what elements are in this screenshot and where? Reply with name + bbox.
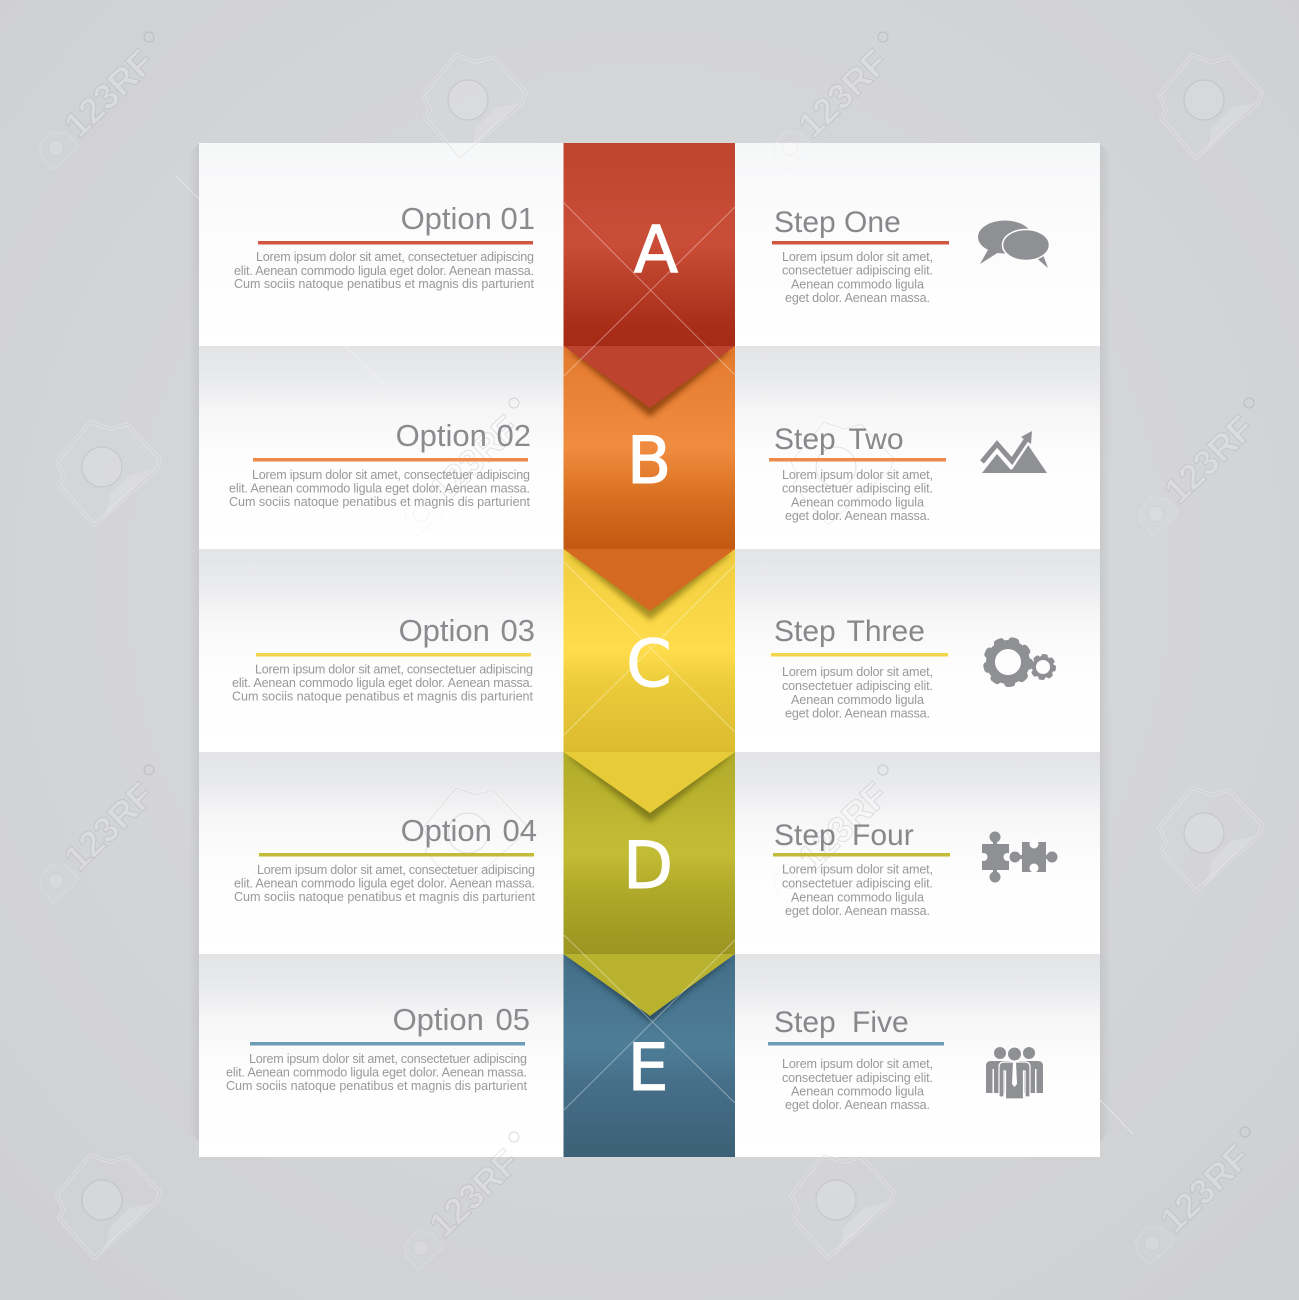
body text: Lorem ipsum dolor sit amet, consectetuer adipiscing (257, 863, 535, 877)
body text: Lorem ipsum dolor sit amet, consectetuer adipiscing (255, 662, 533, 676)
icon: gears (986, 640, 1054, 684)
option 05 block (226, 1002, 530, 1093)
body text: elit. Aenean commodo ligula eget dolor. Aenean massa. (232, 676, 533, 690)
body text (234, 863, 536, 904)
heading: Step One (774, 206, 901, 239)
body text: elit. Aenean commodo ligula eget dolor. Aenean massa. (229, 482, 530, 496)
option 02 block (229, 418, 531, 509)
ribbon segment B (564, 346, 735, 549)
underline (773, 853, 950, 856)
chevron shadow B (568, 553, 731, 620)
ribbon segment A (564, 143, 735, 346)
body text: Lorem ipsum dolor sit amet, (782, 665, 933, 679)
body text (782, 1057, 933, 1112)
body text (782, 468, 933, 523)
heading: Step Five (774, 1006, 909, 1039)
body text (782, 250, 933, 305)
panel: white folded sheet (199, 143, 1100, 1157)
body text: consectetuer adipiscing elit. (782, 876, 933, 890)
body text: eget dolor. Aenean massa. (785, 1098, 930, 1112)
step one block (772, 206, 1050, 305)
body text (226, 1052, 528, 1093)
body text: Cum sociis natoque penatibus et magnis dis parturient (232, 690, 534, 704)
watermark cross lines (564, 203, 735, 1110)
body text: Lorem ipsum dolor sit amet, (782, 250, 933, 264)
heading: Option 03 (399, 613, 535, 648)
panel shadows (188, 143, 1111, 1142)
body text: Aenean commodo ligula (791, 278, 924, 292)
chevron A (564, 346, 735, 408)
step four block (773, 819, 1058, 918)
body text: consectetuer adipiscing elit. (782, 1071, 933, 1085)
faint watermark lines on sheet (175, 175, 1133, 1134)
heading: Option 04 (401, 813, 537, 848)
watermark stamps: 123RF (790, 41, 896, 146)
chevron C (564, 752, 735, 813)
body text: Aenean commodo ligula (791, 693, 924, 707)
watermark stamps: 123RF (421, 1141, 527, 1246)
watermark stamps: 123RF (56, 41, 162, 146)
body text: elit. Aenean commodo ligula eget dolor. Aenean massa. (226, 1066, 527, 1080)
chevron shadow C (568, 756, 731, 822)
icon: mountain chart with arrow (981, 431, 1047, 473)
body text: consectetuer adipiscing elit. (782, 482, 933, 496)
body text (782, 862, 933, 918)
underline (769, 458, 946, 462)
letter E: E (627, 1031, 669, 1106)
body text: elit. Aenean commodo ligula eget dolor. Aenean massa. (234, 264, 534, 278)
body text: Cum sociis natoque penatibus et magnis dis parturient (234, 277, 534, 291)
letter A: A (634, 213, 678, 288)
body text: consectetuer adipiscing elit. (782, 679, 933, 693)
body text: Lorem ipsum dolor sit amet, consectetuer adipiscing (249, 1052, 527, 1066)
body text: Lorem ipsum dolor sit amet, (782, 468, 933, 482)
body text: eget dolor. Aenean massa. (785, 904, 930, 918)
heading: Option 02 (396, 418, 531, 453)
chevron D (564, 954, 735, 1016)
body text (229, 468, 530, 509)
body text: Aenean commodo ligula (791, 890, 924, 904)
underline (256, 653, 531, 656)
letter D: D (623, 829, 673, 904)
option 04 block (234, 813, 537, 904)
underline (771, 653, 948, 656)
watermark stamps: 123RF (56, 774, 162, 879)
underline (253, 458, 528, 462)
central ribbon (564, 143, 735, 1157)
body text: Aenean commodo ligula (791, 1084, 924, 1098)
body text: consectetuer adipiscing elit. (782, 264, 933, 278)
watermark stamps: 123RF (421, 407, 527, 512)
body text: Cum sociis natoque penatibus et magnis dis parturient (234, 890, 536, 904)
body text: Aenean commodo ligula (791, 496, 924, 510)
icon: speech bubbles (978, 220, 1050, 268)
underline (772, 241, 949, 244)
body text (232, 662, 534, 704)
heading: Step Three (774, 615, 925, 648)
ribbon segment D (564, 752, 735, 954)
underline (768, 1042, 944, 1046)
body text: Lorem ipsum dolor sit amet, consectetuer adipiscing (252, 468, 530, 482)
body text: elit. Aenean commodo ligula eget dolor. Aenean massa. (234, 876, 535, 890)
body text: Lorem ipsum dolor sit amet, consectetuer adipiscing (256, 250, 534, 264)
body text: Cum sociis natoque penatibus et magnis dis parturient (229, 495, 530, 509)
body text (782, 665, 933, 720)
ribbon segment E (564, 954, 735, 1157)
underline (250, 1042, 525, 1046)
ribbon segment C (564, 549, 735, 752)
heading: Option 01 (401, 201, 535, 236)
icon: puzzle pieces (980, 832, 1058, 882)
watermark stamps: 123RF (1152, 1136, 1258, 1241)
letter B: B (627, 424, 671, 499)
heading: Option 05 (393, 1002, 530, 1037)
body text: Cum sociis natoque penatibus et magnis dis parturient (226, 1079, 528, 1093)
body text: Lorem ipsum dolor sit amet, (782, 862, 933, 876)
body text: eget dolor. Aenean massa. (785, 706, 930, 720)
body text: eget dolor. Aenean massa. (785, 509, 930, 523)
body text: eget dolor. Aenean massa. (785, 291, 930, 305)
step three block (771, 615, 1054, 720)
body text: Lorem ipsum dolor sit amet, (782, 1057, 933, 1071)
watermark stamps: 123RF (1156, 407, 1262, 512)
heading: Step Two (774, 423, 904, 456)
icon: team of people (986, 1047, 1043, 1099)
step two block (769, 423, 1047, 523)
option 01 block (234, 201, 535, 291)
option 03 block (232, 613, 535, 704)
chevron shadow D (568, 958, 731, 1022)
body text (234, 250, 534, 291)
underline (259, 853, 534, 856)
letter C: C (626, 627, 672, 702)
underline (258, 241, 533, 244)
chevron shadow A (568, 350, 731, 417)
watermark stamps: 123RF (790, 774, 896, 879)
step five block (768, 1006, 1043, 1112)
heading: Step Four (774, 819, 914, 852)
chevron B (564, 549, 735, 611)
